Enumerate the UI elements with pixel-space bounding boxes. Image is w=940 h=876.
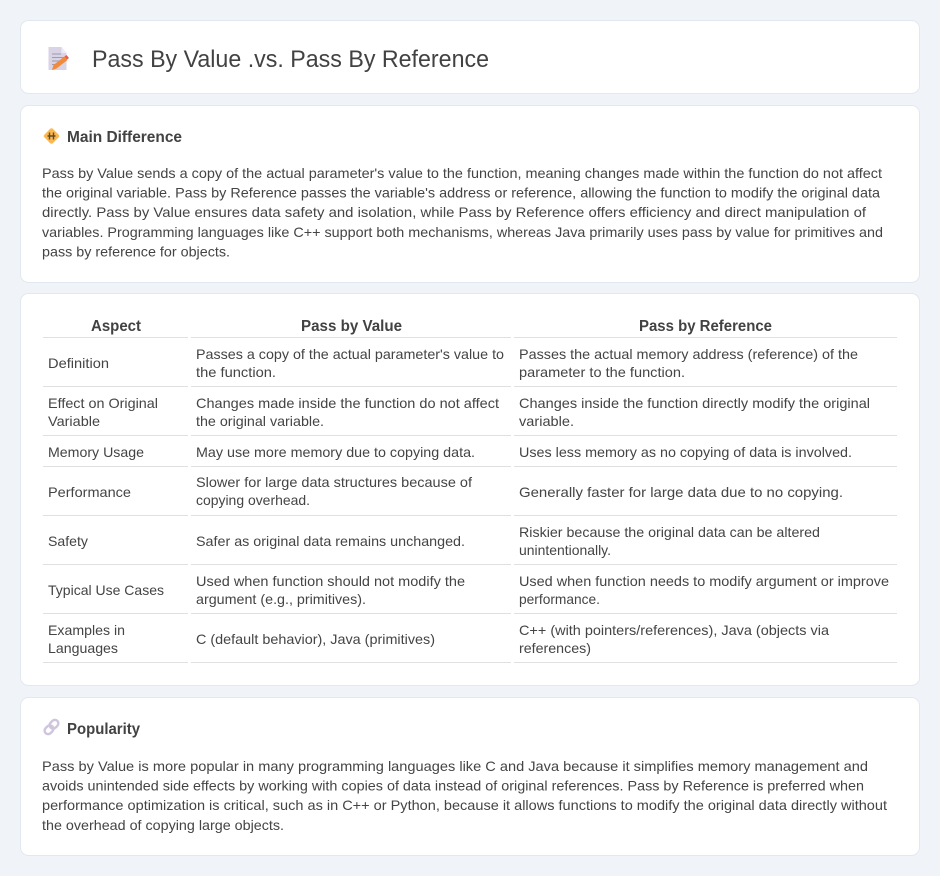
- table row: examples in languages: references): [519, 640, 591, 656]
- text block: popularity body: performance optimization is critical, such as in C++ or Python, because it allows functions to modify the original data directly without: [42, 797, 887, 813]
- text block: main difference body: directly. Pass by Value ensures data safety and isolation, while Pass by Reference offers efficiency and direct manipulation of: [42, 204, 866, 220]
- table row: definition: Passes a copy of the actual parameter's value to: [196, 346, 504, 362]
- panel: main difference: [20, 106, 920, 282]
- icon: chain link: [43, 718, 60, 736]
- heading: main difference: Main Difference: [67, 129, 182, 146]
- table row: definition: Passes the actual memory address (reference) of the: [519, 346, 858, 362]
- table header row: Pass by Reference: [639, 318, 772, 335]
- text block: main difference body: variables. Programming languages like C++ support both mechanisms, whereas Java primarily uses pass by value for primitives and: [42, 224, 883, 240]
- table row: examples in languages: [43, 622, 897, 662]
- panel: comparison table: [20, 294, 920, 686]
- table row: safety: Safety: [48, 533, 88, 549]
- table row: typical use cases: Typical Use Cases: [48, 582, 164, 598]
- text block: popularity body: [42, 758, 887, 833]
- table row: memory usage: [43, 444, 897, 466]
- table row: safety: unintentionally.: [519, 542, 611, 558]
- table row: typical use cases: performance.: [519, 591, 600, 607]
- table row: performance: [43, 474, 897, 516]
- table row: definition: [43, 346, 897, 386]
- table row: memory usage: May use more memory due to copying data.: [196, 444, 475, 460]
- table header row: Aspect: [91, 318, 142, 335]
- table row: typical use cases: [43, 573, 897, 614]
- table row: performance: Performance: [48, 484, 131, 500]
- icon: document with pencil: [48, 47, 69, 70]
- table row: effect on original variable: Changes made inside the function do not affect: [196, 395, 499, 411]
- table row: effect on original variable: Variable: [48, 413, 100, 429]
- table row: performance: Generally faster for large data due to no copying.: [519, 484, 843, 500]
- table row: performance: Slower for large data structures because of: [196, 474, 472, 490]
- table row: safety: Safer as original data remains unchanged.: [196, 533, 465, 549]
- table row: memory usage: Uses less memory as no copying of data is involved.: [519, 444, 852, 460]
- text block: popularity body: avoids unintended side effects by working with copies of data instead of original references. Pass by Reference is preferred when: [42, 778, 864, 794]
- text block: popularity body: the overhead of copying large objects.: [42, 817, 284, 833]
- table row: examples in languages: Languages: [48, 640, 118, 656]
- panel: popularity: [20, 698, 920, 856]
- table row: examples in languages: Examples in: [48, 622, 125, 638]
- table row: effect on original variable: Effect on Original: [48, 395, 158, 411]
- table row: examples in languages: C (default behavior), Java (primitives): [196, 631, 435, 647]
- table row: definition: Definition: [48, 355, 109, 371]
- heading: popularity: Popularity: [67, 721, 140, 738]
- icon: orange diamond sign: [43, 128, 60, 144]
- table row: effect on original variable: [43, 395, 897, 436]
- text block: main difference body: [42, 165, 883, 259]
- table row: safety: Riskier because the original data can be altered: [519, 524, 820, 540]
- text block: popularity body: Pass by Value is more popular in many programming languages like C and Java because it simplifies memory management and: [42, 758, 868, 774]
- table header row: Pass by Value: [301, 318, 402, 335]
- table row: definition: parameter to the function.: [519, 364, 685, 380]
- table row: effect on original variable: variable.: [519, 413, 574, 429]
- text block: main difference body: the original variable. Pass by Reference passes the variable's address or reference, allowing the function to modify the original data: [42, 185, 880, 201]
- text block: main difference body: Pass by Value sends a copy of the actual parameter's value to the function, meaning changes made within the function do not affect: [42, 165, 882, 181]
- table row: typical use cases: Used when function should not modify the: [196, 573, 465, 589]
- table row: memory usage: Memory Usage: [48, 444, 144, 460]
- table row: performance: copying overhead.: [196, 492, 310, 508]
- title: Pass By Value .vs. Pass By Reference: [92, 46, 489, 73]
- table row: typical use cases: Used when function needs to modify argument or improve: [519, 573, 889, 589]
- table row: examples in languages: C++ (with pointers/references), Java (objects via: [519, 622, 829, 638]
- table row: effect on original variable: the original variable.: [196, 413, 324, 429]
- panel: title header: [20, 20, 920, 94]
- table row: typical use cases: argument (e.g., primitives).: [196, 591, 366, 607]
- table row: safety: [43, 524, 897, 564]
- table row: effect on original variable: Changes inside the function directly modify the original: [519, 395, 870, 411]
- table header row: [43, 318, 897, 338]
- text block: main difference body: pass by reference for objects.: [42, 243, 230, 259]
- table row: definition: the function.: [196, 364, 276, 380]
